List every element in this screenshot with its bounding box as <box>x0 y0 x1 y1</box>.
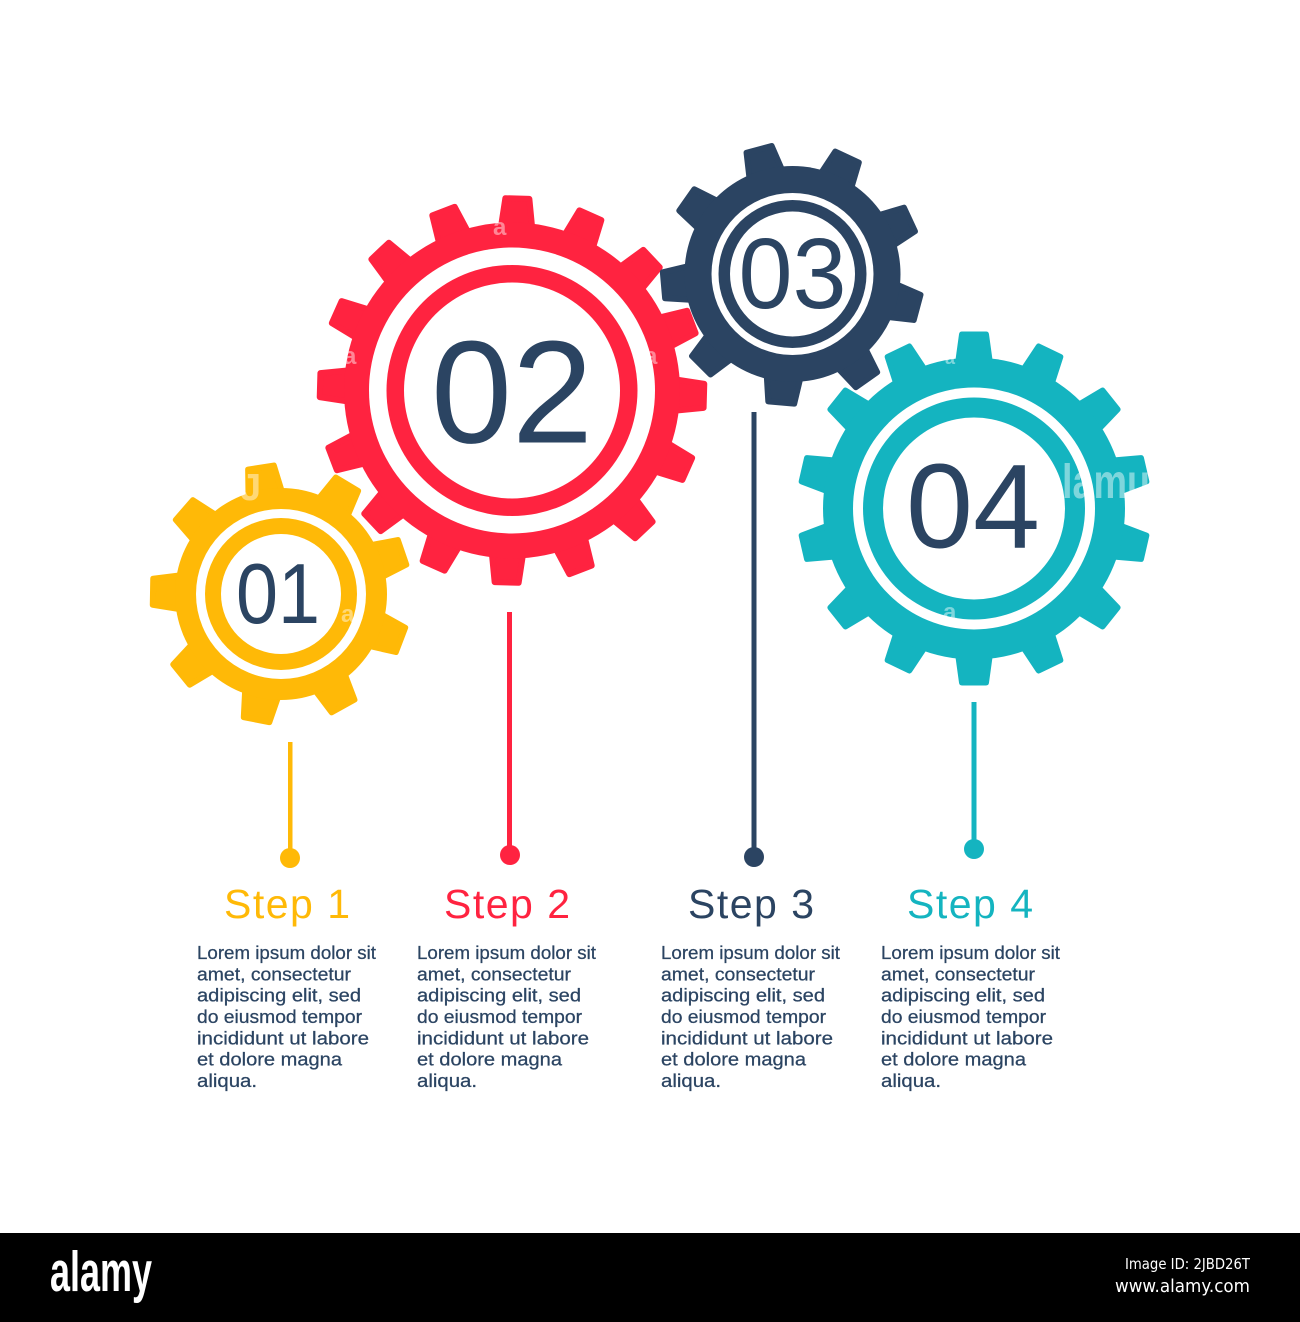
watermark fragments: a <box>493 214 507 241</box>
connector: step 4 <box>964 702 984 859</box>
watermark fragments: a <box>943 599 957 626</box>
watermark fragments: a <box>341 601 355 628</box>
step 1 text block: amet, consectetur <box>197 964 351 984</box>
gear 02 (red) <box>320 198 704 583</box>
step 4 text block: incididunt ut labore <box>881 1028 1053 1048</box>
step 4 text block: adipiscing elit, sed <box>881 986 1045 1006</box>
number 03: 03 <box>738 218 846 330</box>
step 3 heading: Step 3 <box>688 881 814 927</box>
step 2 text block: Lorem ipsum dolor sit <box>417 943 596 963</box>
connector: step 1 <box>280 742 300 868</box>
number 02: 02 <box>431 310 593 474</box>
step 1 heading: Step 1 <box>224 881 350 927</box>
step 1 text block: do eiusmod tempor <box>197 1007 362 1027</box>
step 2 text block <box>417 943 596 1091</box>
watermark fragments: a <box>343 343 357 370</box>
gear 01 (gold) <box>153 465 408 723</box>
step 1 text block <box>197 943 376 1091</box>
number 01: 01 <box>236 547 320 642</box>
step 3 text block: aliqua. <box>661 1071 721 1091</box>
step 4 text block: et dolore magna <box>881 1050 1027 1070</box>
step 3 text block: Lorem ipsum dolor sit <box>661 943 840 963</box>
step 2 text block: amet, consectetur <box>417 964 571 984</box>
step 1 text block: adipiscing elit, sed <box>197 986 361 1006</box>
step 2 text block: do eiusmod tempor <box>417 1007 582 1027</box>
step 4 text block <box>881 943 1060 1091</box>
step 4 text block: aliqua. <box>881 1071 941 1091</box>
footer bar <box>0 1233 1300 1322</box>
connector: step 2 <box>500 612 520 865</box>
step 4 text block: amet, consectetur <box>881 964 1035 984</box>
step 2 text block: aliqua. <box>417 1071 477 1091</box>
step 3 text block: et dolore magna <box>661 1050 807 1070</box>
step 1 text block: et dolore magna <box>197 1050 343 1070</box>
step 1 text block: aliqua. <box>197 1071 257 1091</box>
step 2 text block: incididunt ut labore <box>417 1028 589 1048</box>
step 4 text block: Lorem ipsum dolor sit <box>881 943 1060 963</box>
step 3 text block <box>661 943 840 1091</box>
watermark fragments: J <box>240 467 261 509</box>
step 3 text block: incididunt ut labore <box>661 1028 833 1048</box>
step 2 text block: et dolore magna <box>417 1050 563 1070</box>
watermark fragments: a <box>644 343 658 370</box>
step 4 text block: do eiusmod tempor <box>881 1007 1046 1027</box>
watermark fragments <box>240 214 1150 628</box>
step 3 text block: do eiusmod tempor <box>661 1007 826 1027</box>
step 2 heading: Step 2 <box>444 881 570 927</box>
step 4 heading: Step 4 <box>907 881 1033 927</box>
image id: Image ID: 2JBD26T <box>1125 1255 1251 1273</box>
footer logo: alamy <box>50 1240 152 1304</box>
step 1 text block: Lorem ipsum dolor sit <box>197 943 376 963</box>
watermark fragments: a <box>945 348 956 368</box>
step 3 text block: adipiscing elit, sed <box>661 986 825 1006</box>
number 04: 04 <box>906 440 1040 574</box>
watermark fragments: lamu <box>1062 456 1150 509</box>
step 2 text block: adipiscing elit, sed <box>417 986 581 1006</box>
step 3 text block: amet, consectetur <box>661 964 815 984</box>
website: www.alamy.com <box>1115 1276 1250 1297</box>
gear 03 (navy) <box>663 145 922 404</box>
gear 04 (teal) <box>801 334 1147 682</box>
connector: step 3 <box>744 412 764 867</box>
step 1 text block: incididunt ut labore <box>197 1028 369 1048</box>
